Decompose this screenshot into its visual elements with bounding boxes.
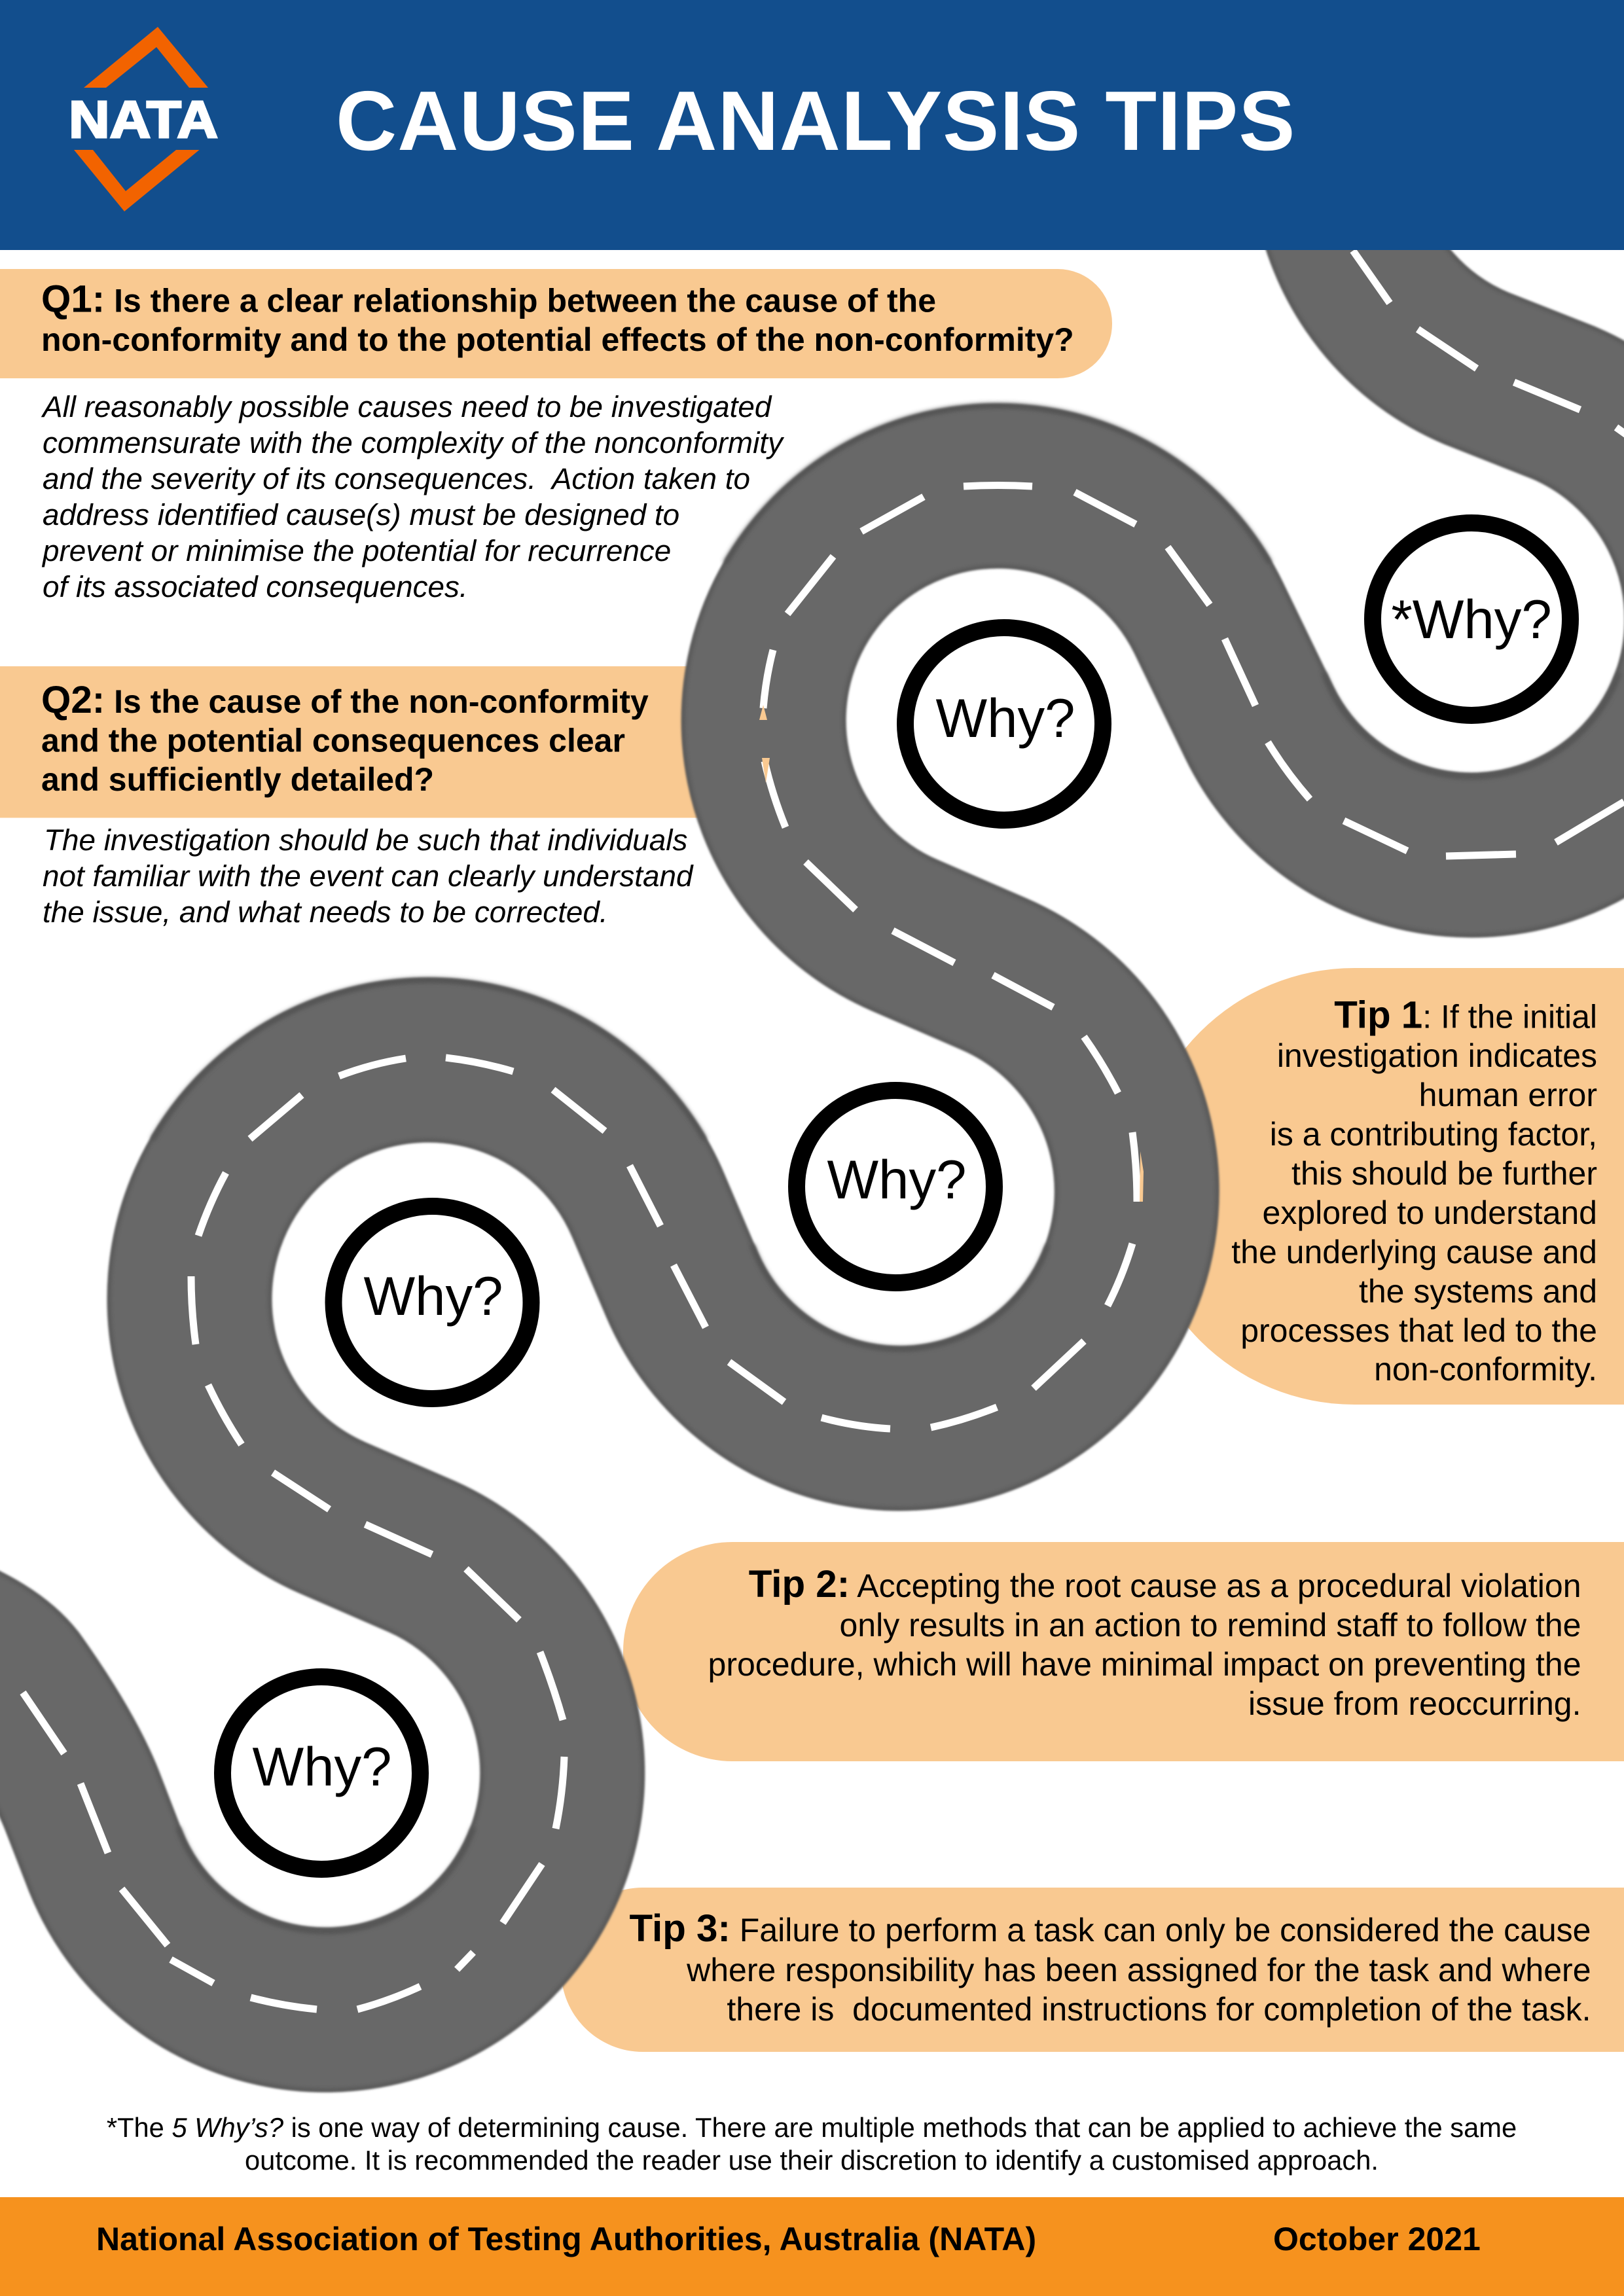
icon: *Why? circle: *Why? (1391, 589, 1552, 650)
heading: question 1 (41, 278, 1074, 358)
text block: question 2 guidance: not familiar with the event can clearly understand (43, 859, 694, 893)
text block: question 1 guidance: address identified cause(s) must be designed to (43, 498, 679, 531)
heading: question 2: and the potential consequences clear (41, 723, 625, 759)
heading: question 1: Q1: Is there a clear relationship between the cause of the (41, 278, 936, 321)
text block: question 1 guidance: of its associated consequences. (43, 570, 468, 603)
panel: Tip 3 pill background (561, 1888, 1624, 2052)
footnote: *The 5 Why’s? is one way of determining cause. There are multiple methods that can be applied to achieve the same (107, 2112, 1517, 2143)
text block: tip 1: non-conformity. (1374, 1351, 1597, 1388)
text block: question 1 guidance: and the severity of its consequences. Action taken to (43, 462, 750, 495)
text block: question 2 guidance (43, 823, 694, 929)
text block: tip 1: Tip 1: If the initial (1334, 994, 1597, 1037)
text block: tip 1 (1231, 994, 1597, 1388)
text block: tip 2: Tip 2: Accepting the root cause as a procedural violation (749, 1563, 1581, 1605)
footer: organisation name: National Association of Testing Authorities, Australia (NATA) (96, 2221, 1036, 2257)
text block: tip 3: there is documented instructions for completion of the task. (727, 1991, 1591, 2028)
text block: tip 2: procedure, which will have minimal impact on preventing the (708, 1646, 1581, 1683)
text block: tip 1: explored to understand (1263, 1194, 1597, 1231)
footnote: outcome. It is recommended the reader use their discretion to identify a customised approach. (245, 2145, 1379, 2176)
text block: question 2 guidance: the issue, and what needs to be corrected. (43, 895, 608, 929)
panel: Tip 1 pill background (1136, 968, 1624, 1405)
icon: Why? circle 3 (797, 1090, 994, 1283)
text block: tip 3 (629, 1907, 1591, 2028)
text block: tip 2: only results in an action to remind staff to follow the (839, 1607, 1581, 1643)
winding road illustration (0, 191, 1624, 2010)
icon: Why? circle 4: Why? (364, 1266, 503, 1327)
text block: tip 1: investigation indicates (1277, 1037, 1597, 1074)
text block: tip 2: issue from reoccurring. (1248, 1685, 1581, 1722)
text block: tip 3: Tip 3: Failure to perform a task can only be considered the cause (629, 1907, 1591, 1950)
header band (0, 0, 1624, 250)
heading: question 2 (41, 679, 649, 798)
icon: Why? circle 2 (905, 628, 1103, 820)
icon: Why? circle 5 (223, 1677, 420, 1869)
heading: question 1: non-conformity and to the potential effects of the non-conformity? (41, 321, 1074, 358)
panel: Q1 pill background (0, 269, 1112, 378)
text block: question 1 guidance: commensurate with the complexity of the nonconformity (43, 426, 785, 459)
icon: NATA logo (69, 27, 218, 211)
panel: Tip 2 pill background (623, 1542, 1624, 1761)
text block: question 2 guidance: The investigation should be such that individuals (44, 823, 687, 857)
icon: NATA logo: NATA (69, 90, 218, 149)
footer: date: October 2021 (1273, 2221, 1481, 2257)
text block: question 1 guidance (41, 390, 785, 603)
text block: question 1 guidance: All reasonably possible causes need to be investigated (41, 390, 772, 423)
icon: Why? circle 5: Why? (253, 1736, 391, 1797)
text block: tip 1: processes that led to the (1240, 1312, 1597, 1349)
peach slivers showing through the dashes (759, 705, 1144, 1202)
icon: *Why? circle (1373, 523, 1570, 715)
text block: question 1 guidance: prevent or minimise the potential for recurrence (41, 534, 671, 567)
text block: tip 1: the systems and (1359, 1273, 1597, 1310)
text block: tip 1: this should be further (1291, 1155, 1597, 1192)
footer band (0, 2197, 1624, 2296)
icon: Why? circle 4 (334, 1206, 532, 1399)
heading: question 2: Q2: Is the cause of the non-conformity (41, 679, 649, 721)
icon: Why? circle 2: Why? (936, 688, 1075, 749)
text block: tip 3: where responsibility has been assigned for the task and where (686, 1952, 1591, 1988)
road centre-line dashes (23, 251, 1624, 2009)
text block: tip 1: human error (1419, 1077, 1597, 1113)
text block: tip 1: the underlying cause and (1231, 1234, 1597, 1270)
heading: question 2: and sufficiently detailed? (41, 761, 434, 798)
road edge shading (153, 405, 1619, 1931)
panel: Q2 pill background (0, 666, 770, 818)
text block: tip 1: is a contributing factor, (1270, 1116, 1597, 1153)
footnote (107, 2112, 1517, 2176)
icon: Why? circle 3: Why? (827, 1149, 966, 1210)
text block: tip 2 (708, 1563, 1581, 1722)
title: CAUSE ANALYSIS TIPS (336, 74, 1295, 168)
